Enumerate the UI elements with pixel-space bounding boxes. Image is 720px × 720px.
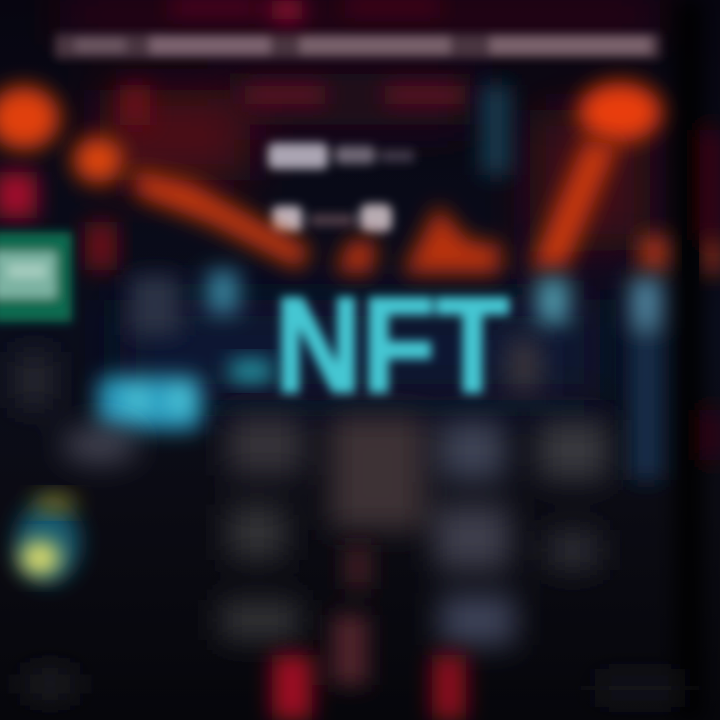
grey blurred figure blocks	[15, 340, 685, 698]
yellow and cyan circular icon	[16, 494, 80, 582]
green panel at left	[0, 232, 72, 322]
diagonal orange streak	[132, 170, 310, 270]
small orange peaks above the NFT lettering	[335, 205, 502, 274]
blue-grey vertical bars	[130, 85, 662, 480]
bottom red strips	[272, 545, 466, 720]
dark vertical band at right	[676, 0, 720, 720]
dash before the lettering	[230, 360, 272, 382]
background glow: upper red haze and lower navy	[60, 0, 660, 400]
right orange light and streak	[530, 82, 720, 274]
left orange lights	[0, 86, 123, 270]
title bar: illegible blurred heading	[55, 34, 660, 58]
top red accent	[120, 0, 465, 125]
subtitle blurred white text	[268, 143, 414, 232]
large NFT lettering: NFT	[274, 269, 510, 421]
cyan side label	[98, 376, 202, 430]
